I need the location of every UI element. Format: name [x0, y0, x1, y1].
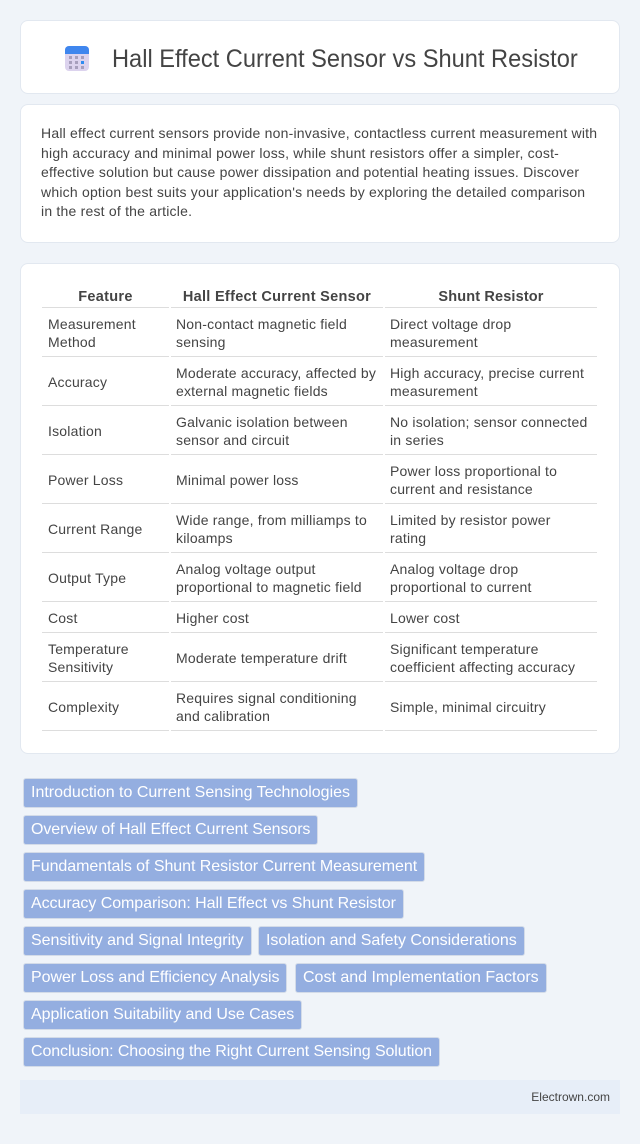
icon: calendar grid [65, 46, 89, 71]
panel: header [20, 20, 620, 94]
tag: power loss: Power Loss and Efficiency Analysis [31, 969, 279, 986]
row: current range: Limited by resistor power [390, 512, 551, 528]
row: current range [48, 512, 551, 546]
tag: cost: Cost and Implementation Factors [303, 969, 539, 986]
intro text [41, 125, 597, 219]
row: accuracy: Accuracy [48, 374, 107, 390]
intro text: in the rest of the article. [41, 203, 192, 219]
row: current range: Current Range [48, 521, 142, 537]
row: isolation: Isolation [48, 423, 102, 439]
row: accuracy: external magnetic fields [176, 383, 328, 399]
row: temperature sensitivity: Temperature [48, 641, 129, 657]
table header: hall effect current sensor: Hall Effect Current Sensor [183, 289, 371, 305]
row: power loss: current and resistance [390, 481, 533, 497]
row: measurement method: Non-contact magnetic field [176, 316, 347, 332]
row: complexity: Requires signal conditioning [176, 690, 357, 706]
row: accuracy [48, 365, 584, 399]
tag: application [23, 1000, 302, 1030]
tag: conclusion [23, 1037, 440, 1067]
row: accuracy: High accuracy, precise current [390, 365, 584, 381]
panel: introduction [20, 104, 620, 243]
row: accuracy: measurement [390, 383, 478, 399]
row: isolation [48, 414, 587, 448]
table header: shunt resistor: Shunt Resistor [438, 289, 544, 305]
row: measurement method: Measurement [48, 316, 136, 332]
tag: introduction [23, 778, 358, 808]
row: accuracy: Moderate accuracy, affected by [176, 365, 376, 381]
row: cost: Higher cost [176, 610, 249, 626]
row: cost: Cost [48, 610, 78, 626]
tag: isolation [258, 926, 525, 956]
row: cost [48, 610, 460, 626]
tag: accuracy [23, 889, 404, 919]
row: complexity: Complexity [48, 699, 119, 715]
tag: power loss [23, 963, 287, 993]
row: output type: proportional to current [390, 579, 532, 595]
row: measurement method: Method [48, 334, 96, 350]
title: Hall Effect Current Sensor vs Shunt Resistor [112, 45, 578, 73]
row: measurement method [48, 316, 511, 350]
row: measurement method: sensing [176, 334, 226, 350]
row: power loss: Minimal power loss [176, 472, 299, 488]
row: measurement method: Direct voltage drop [390, 316, 511, 332]
row: current range: Wide range, from milliamps to [176, 512, 367, 528]
row: measurement method: measurement [390, 334, 478, 350]
row: temperature sensitivity: Significant temperature [390, 641, 539, 657]
row: temperature sensitivity: Sensitivity [48, 659, 113, 675]
tag: fundamentals: Fundamentals of Shunt Resistor Current Measurement [31, 858, 417, 875]
intro text: high accuracy and minimal power loss, while shunt resistors offer a simpler, cost- [41, 145, 559, 161]
intro text: effective solution but cause power dissipation and potential heating issues. Discover [41, 164, 579, 180]
intro text: which option best suits your application's needs by exploring the detailed comparison [41, 184, 585, 200]
row: isolation: in series [390, 432, 444, 448]
intro text: Hall effect current sensors provide non-invasive, contactless current measurement with [41, 125, 597, 141]
row: output type: Analog voltage drop [390, 561, 518, 577]
tag: sensitivity [23, 926, 252, 956]
tag: introduction: Introduction to Current Sensing Technologies [31, 784, 350, 801]
tag: isolation: Isolation and Safety Considerations [266, 932, 517, 949]
tag: accuracy: Accuracy Comparison: Hall Effect vs Shunt Resistor [31, 895, 396, 912]
row: current range: kiloamps [176, 530, 233, 546]
tag: overview: Overview of Hall Effect Current Sensors [31, 821, 310, 838]
row: complexity: Simple, minimal circuitry [390, 699, 546, 715]
row: output type: Output Type [48, 570, 126, 586]
row: power loss [48, 463, 557, 497]
table header: feature: Feature [78, 289, 133, 305]
panel: comparison table [20, 263, 620, 754]
row: output type [48, 561, 532, 595]
footer [20, 1080, 620, 1114]
row: complexity [48, 690, 546, 724]
row: cost: Lower cost [390, 610, 460, 626]
row: isolation: sensor and circuit [176, 432, 289, 448]
tag: cost [295, 963, 547, 993]
row: temperature sensitivity [48, 641, 575, 675]
tag: application: Application Suitability and Use Cases [31, 1006, 294, 1023]
row: output type: proportional to magnetic field [176, 579, 362, 595]
row: isolation: No isolation; sensor connected [390, 414, 587, 430]
row: complexity: and calibration [176, 708, 270, 724]
tag: overview [23, 815, 318, 845]
row: power loss: Power loss proportional to [390, 463, 557, 479]
tag: conclusion: Conclusion: Choosing the Right Current Sensing Solution [31, 1043, 432, 1060]
row: temperature sensitivity: coefficient affecting accuracy [390, 659, 575, 675]
tag: sensitivity: Sensitivity and Signal Integrity [31, 932, 244, 949]
row: current range: rating [390, 530, 426, 546]
tag: fundamentals [23, 852, 425, 882]
row: output type: Analog voltage output [176, 561, 316, 577]
row: temperature sensitivity: Moderate temperature drift [176, 650, 347, 666]
footer: Electrown.com [531, 1090, 610, 1104]
row: power loss: Power Loss [48, 472, 123, 488]
row: isolation: Galvanic isolation between [176, 414, 348, 430]
